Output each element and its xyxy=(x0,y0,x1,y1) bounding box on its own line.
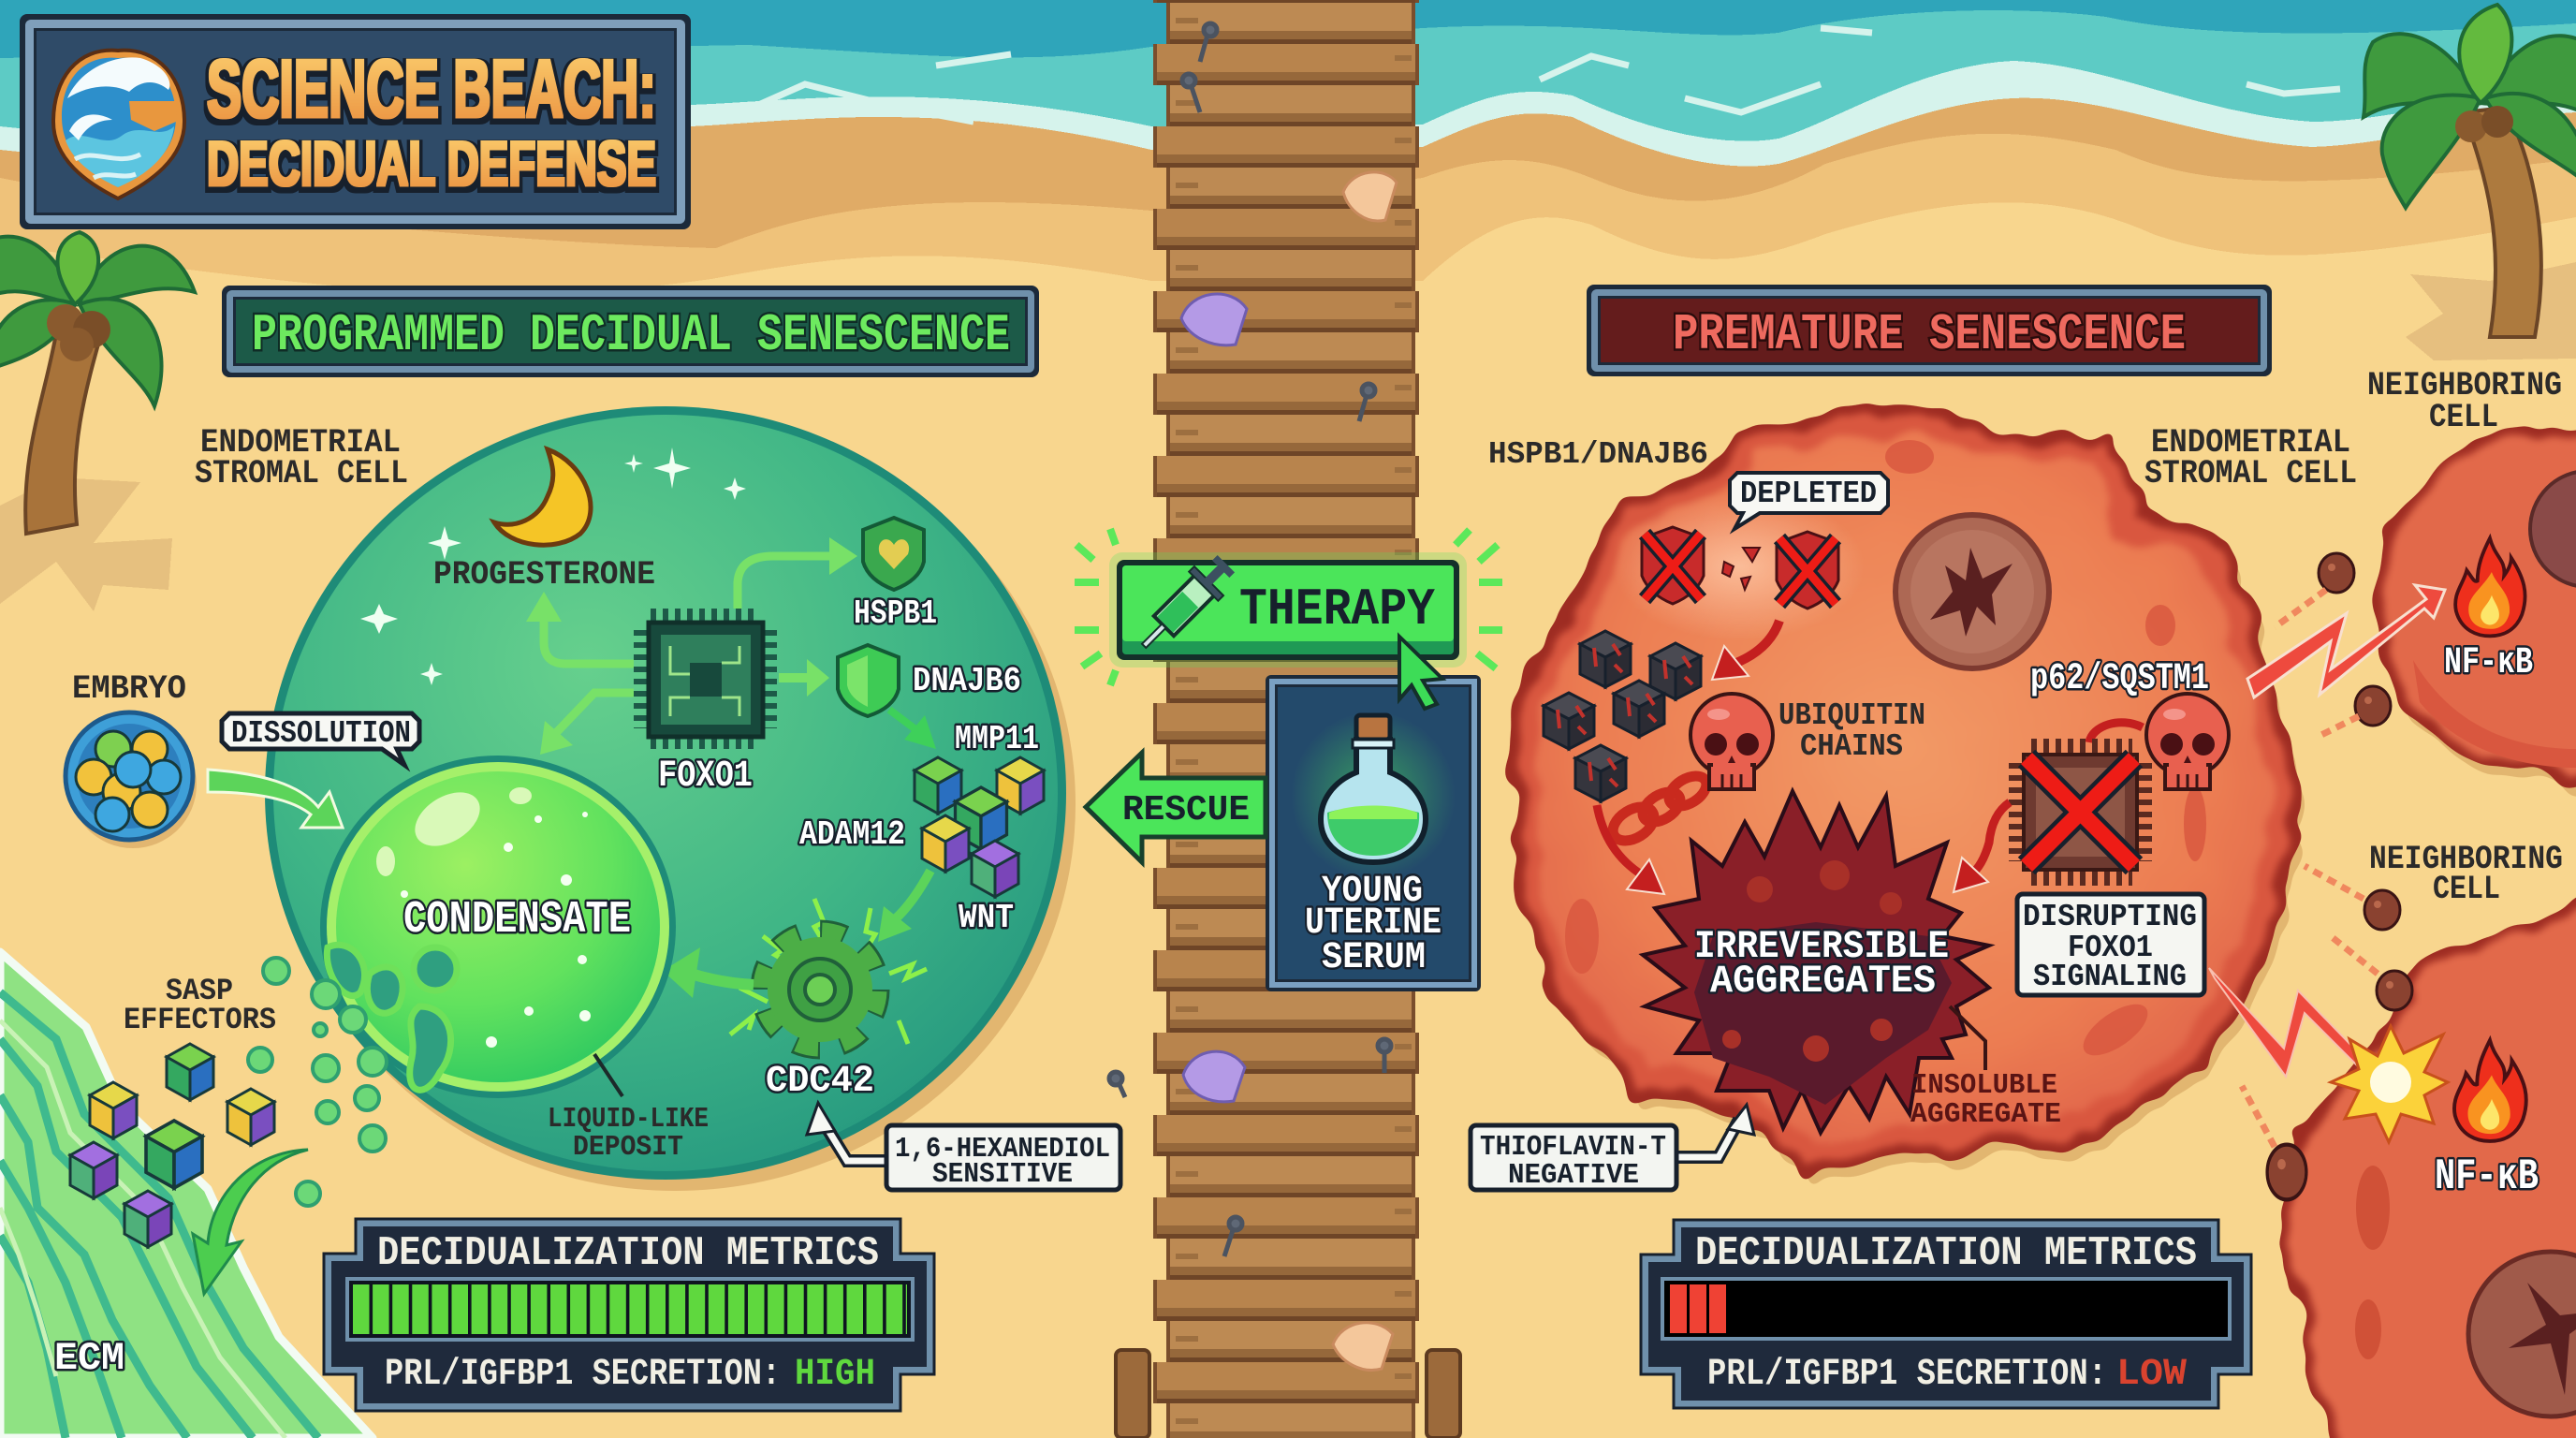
arrow: cdc42 to condensate xyxy=(691,974,754,985)
label: endometrial stromal cell (left) xyxy=(195,424,408,492)
arrow head xyxy=(1712,646,1749,680)
stars xyxy=(360,448,746,685)
label: foxo1: FOXO1 xyxy=(658,756,753,798)
label: progesterone: PROGESTERONE xyxy=(433,556,655,594)
arc: skull to chip xyxy=(2089,723,2143,742)
panel: metrics right xyxy=(1641,1220,2251,1408)
label: adam12: ADAM12 xyxy=(799,815,905,854)
label: young uterine serum xyxy=(1305,871,1442,979)
label: sasp effectors: EFFECTORS xyxy=(124,1003,276,1037)
label: young uterine serum: SERUM xyxy=(1322,937,1426,979)
icon: depleted shield with x xyxy=(1777,532,1838,609)
icon: ubiquitin chain xyxy=(1607,770,1712,847)
icon: cdc42 gear xyxy=(762,932,878,1048)
boardwalk xyxy=(1153,0,1419,1438)
background: wet sand band xyxy=(0,0,2576,248)
panel: metrics left xyxy=(324,1219,934,1411)
callout: disrupting foxo1 signaling: FOXO1 xyxy=(2068,931,2153,965)
arrow head xyxy=(1627,859,1664,894)
boardwalk posts xyxy=(1116,1350,1460,1438)
header: programmed decidual senescence: PROGRAMMED DECIDUAL SENESCENCE xyxy=(252,305,1010,365)
arrow: lightning to top neighbor xyxy=(2247,585,2445,697)
label: hspb1: HSPB1 xyxy=(854,594,937,633)
panel: young uterine serum xyxy=(1266,675,1481,991)
arrow head xyxy=(540,721,573,755)
arrow head xyxy=(878,906,912,942)
icon: foxo1 chip xyxy=(641,616,769,741)
arrow: lightning to bottom neighbor xyxy=(2209,968,2389,1086)
title text: DECIDUAL DEFENSE xyxy=(207,128,656,199)
palm tree: right xyxy=(2364,5,2576,360)
callout: thioflavin-t negative: NEGATIVE xyxy=(1508,1159,1639,1192)
callout: thioflavin-t negative: THIOFLAVIN-T xyxy=(1480,1131,1666,1164)
label: neighboring cell top xyxy=(2367,367,2562,436)
palm tree: left xyxy=(0,232,195,611)
label: insoluble aggregate xyxy=(1910,1069,2061,1131)
label: p62/sqstm1: p62/SQSTM1 xyxy=(2030,658,2209,700)
arrow: wnt to cdc42 xyxy=(895,871,930,919)
bar: low xyxy=(1670,1284,1728,1333)
callout: 1,6-hexanediol sensitive: SENSITIVE xyxy=(932,1158,1073,1191)
icon: nucleus xyxy=(1895,515,2049,668)
label: nf-kb: NF-κB xyxy=(2444,642,2533,684)
background: deep sea xyxy=(0,0,2576,58)
icons: effector cubes xyxy=(915,757,1044,897)
callout: disrupting foxo1 signaling: SIGNALING xyxy=(2033,960,2187,994)
therapy rays xyxy=(1075,529,1502,685)
label: endometrial stromal cell (left): STROMAL CELL xyxy=(195,455,408,492)
icon: wave shield xyxy=(53,51,184,198)
icon: hspb1 shield xyxy=(863,518,924,590)
label: insoluble aggregate: INSOLUBLE xyxy=(1911,1069,2057,1102)
icon: irreversible aggregates: IRREVERSIBLE xyxy=(1694,924,1949,969)
icon: flask xyxy=(1291,712,1456,880)
label: nf-kb: NF-κB xyxy=(2435,1152,2539,1201)
icon: syringe xyxy=(1130,550,1240,660)
burst core xyxy=(2370,1062,2411,1103)
header: premature senescence xyxy=(1587,285,2272,376)
arrow: to ECM xyxy=(193,1150,308,1294)
button: therapy xyxy=(1117,550,1459,660)
label: ECM: ECM xyxy=(54,1336,124,1381)
panel: green stromal cell xyxy=(265,406,1076,1191)
arrow: chip to aggregates xyxy=(1970,802,2010,875)
bar: high xyxy=(353,1284,907,1334)
label: mmp11: MMP11 xyxy=(955,720,1039,758)
icons: damaged cubes xyxy=(1544,631,1701,801)
icon: flame xyxy=(2454,1040,2526,1141)
pointer: liquid-like deposit xyxy=(594,1054,622,1096)
panel: neighboring cell bottom xyxy=(2283,889,2576,1438)
label: dnajb6: DNAJB6 xyxy=(913,662,1021,700)
icon: disrupted foxo1 chip xyxy=(2015,746,2145,878)
arrow head xyxy=(829,537,857,575)
label: embryo: EMBRYO xyxy=(72,670,186,708)
icon: irreversible aggregates: AGGREGATES xyxy=(1710,959,1936,1004)
panel: metrics left: HIGH xyxy=(795,1354,875,1396)
debris particles xyxy=(2242,866,2412,1199)
label: cdc42: CDC42 xyxy=(766,1061,874,1103)
callout: disrupting foxo1 signaling xyxy=(2017,894,2204,995)
icon: impact burst xyxy=(2331,1026,2448,1142)
label: wnt: WNT xyxy=(959,899,1014,937)
arrow: embryo to condensate xyxy=(208,770,343,828)
arrow head xyxy=(1954,858,1988,892)
panel: metrics left: DECIDUALIZATION METRICS xyxy=(377,1230,879,1277)
debris particles xyxy=(2275,553,2391,735)
panel: metrics right: DECIDUALIZATION METRICS xyxy=(1695,1230,2197,1277)
callout: disrupting foxo1 signaling: DISRUPTING xyxy=(2023,900,2197,934)
glow behind depleted shields xyxy=(1613,492,1866,641)
label: liquid-like deposit: LIQUID-LIKE xyxy=(548,1103,709,1136)
panel: red stromal cell xyxy=(1488,410,2303,1185)
title text xyxy=(207,42,656,199)
label: liquid-like deposit xyxy=(548,1103,709,1164)
secreted droplets xyxy=(248,958,387,1206)
panel: neighboring cell top xyxy=(2380,426,2576,790)
label: young uterine serum: YOUNG xyxy=(1322,871,1423,913)
arrow: foxo1 to hspb1 xyxy=(738,556,831,609)
arrow: foxo1 to progesterone xyxy=(544,618,634,664)
arrow: shields to cubes xyxy=(1732,621,1779,665)
icon: skull xyxy=(2146,694,2229,789)
label: neighboring cell top: CELL xyxy=(2429,399,2498,436)
callout: 1,6-hexanediol sensitive: 1,6-HEXANEDIOL xyxy=(895,1133,1110,1166)
label: condensate: CONDENSATE xyxy=(403,895,631,946)
label: ubiquitin chains: UBIQUITIN xyxy=(1778,698,1925,733)
callout: depleted xyxy=(1730,473,1888,529)
icon: moon progesterone xyxy=(494,449,591,545)
icon: irreversible aggregates xyxy=(1643,791,1989,1133)
label: insoluble aggregate: AGGREGATE xyxy=(1910,1098,2061,1131)
label: neighboring cell bottom: CELL xyxy=(2433,871,2500,908)
header: premature senescence: PREMATURE SENESCENCE xyxy=(1673,305,2186,364)
panel: metrics right: PRL/IGFBP1 SECRETION: xyxy=(1707,1354,2107,1396)
callout: depleted: DEPLETED xyxy=(1740,477,1877,511)
label: liquid-like deposit: DEPOSIT xyxy=(573,1131,683,1164)
label: endometrial stromal cell (right) xyxy=(2144,424,2357,492)
arrow head xyxy=(904,715,936,749)
pointer: insoluble aggregate xyxy=(1950,1006,1985,1070)
icon: flame xyxy=(2455,538,2525,636)
arrow: foxo1 to dnajb6 xyxy=(779,673,811,682)
background: light tan sand band xyxy=(0,0,2576,294)
ECM waves xyxy=(0,952,373,1438)
label: sasp effectors xyxy=(124,974,276,1037)
label: ubiquitin chains xyxy=(1778,698,1925,764)
blotches xyxy=(1565,440,2206,1065)
arrow head xyxy=(663,947,700,998)
callout: dissolution xyxy=(222,713,419,765)
header: programmed decidual senescence xyxy=(222,286,1039,377)
icon: heart on shield xyxy=(879,539,909,569)
label: ubiquitin chains: CHAINS xyxy=(1800,729,1903,764)
shells xyxy=(1181,172,1397,1370)
background: turquoise sea xyxy=(0,0,2576,141)
panel: metrics right: LOW xyxy=(2116,1354,2187,1396)
panel: metrics left: PRL/IGFBP1 SECRETION: xyxy=(385,1354,781,1396)
label: hspb1/dnajb6: HSPB1/DNAJB6 xyxy=(1488,437,1708,472)
title banner xyxy=(20,14,691,229)
icon: sparks xyxy=(730,899,927,1044)
arrow head xyxy=(807,659,829,697)
arrow: rescue: RESCUE xyxy=(1122,790,1250,830)
label: sasp effectors: SASP xyxy=(166,974,233,1008)
background: sea foam xyxy=(0,0,2576,167)
arrow: dnajb6 to mmp11 xyxy=(889,710,919,732)
label: endometrial stromal cell (right): ENDOMETRIAL xyxy=(2151,424,2350,462)
icon: cursor xyxy=(1399,637,1442,709)
icons: sasp cubes xyxy=(70,1044,274,1247)
icon: embryo xyxy=(66,712,197,848)
arrow: chains to aggregates xyxy=(1597,805,1643,875)
blotches xyxy=(2355,1166,2390,1359)
label: endometrial stromal cell (left): ENDOMETRIAL xyxy=(200,424,401,462)
icon: dnajb6 shield xyxy=(838,645,899,716)
therapy glow xyxy=(1109,552,1467,668)
callout: thioflavin-t negative xyxy=(1471,1105,1754,1192)
icon: nucleus xyxy=(2468,1252,2576,1416)
icon: depleted shield with x xyxy=(1642,527,1704,604)
arrow head xyxy=(526,592,562,622)
button: therapy: THERAPY xyxy=(1239,580,1435,639)
panel: condensate droplet xyxy=(320,756,676,1098)
arrow: rescue xyxy=(1086,753,1266,862)
label: young uterine serum: UTERINE xyxy=(1305,902,1442,945)
label: endometrial stromal cell (right): STROMAL CELL xyxy=(2144,455,2357,492)
icon: skull xyxy=(1690,694,1773,789)
drips xyxy=(327,945,457,1090)
shield fragments xyxy=(1722,548,1760,590)
callout: dissolution: DISSOLUTION xyxy=(231,716,411,751)
label: neighboring cell bottom xyxy=(2369,841,2563,908)
callout: 1,6-hexanediol sensitive xyxy=(807,1103,1120,1191)
arrow: foxo1 to condensate xyxy=(554,693,634,735)
nails on boardwalk xyxy=(1109,23,1391,1256)
title text: SCIENCE BEACH: xyxy=(207,42,656,135)
